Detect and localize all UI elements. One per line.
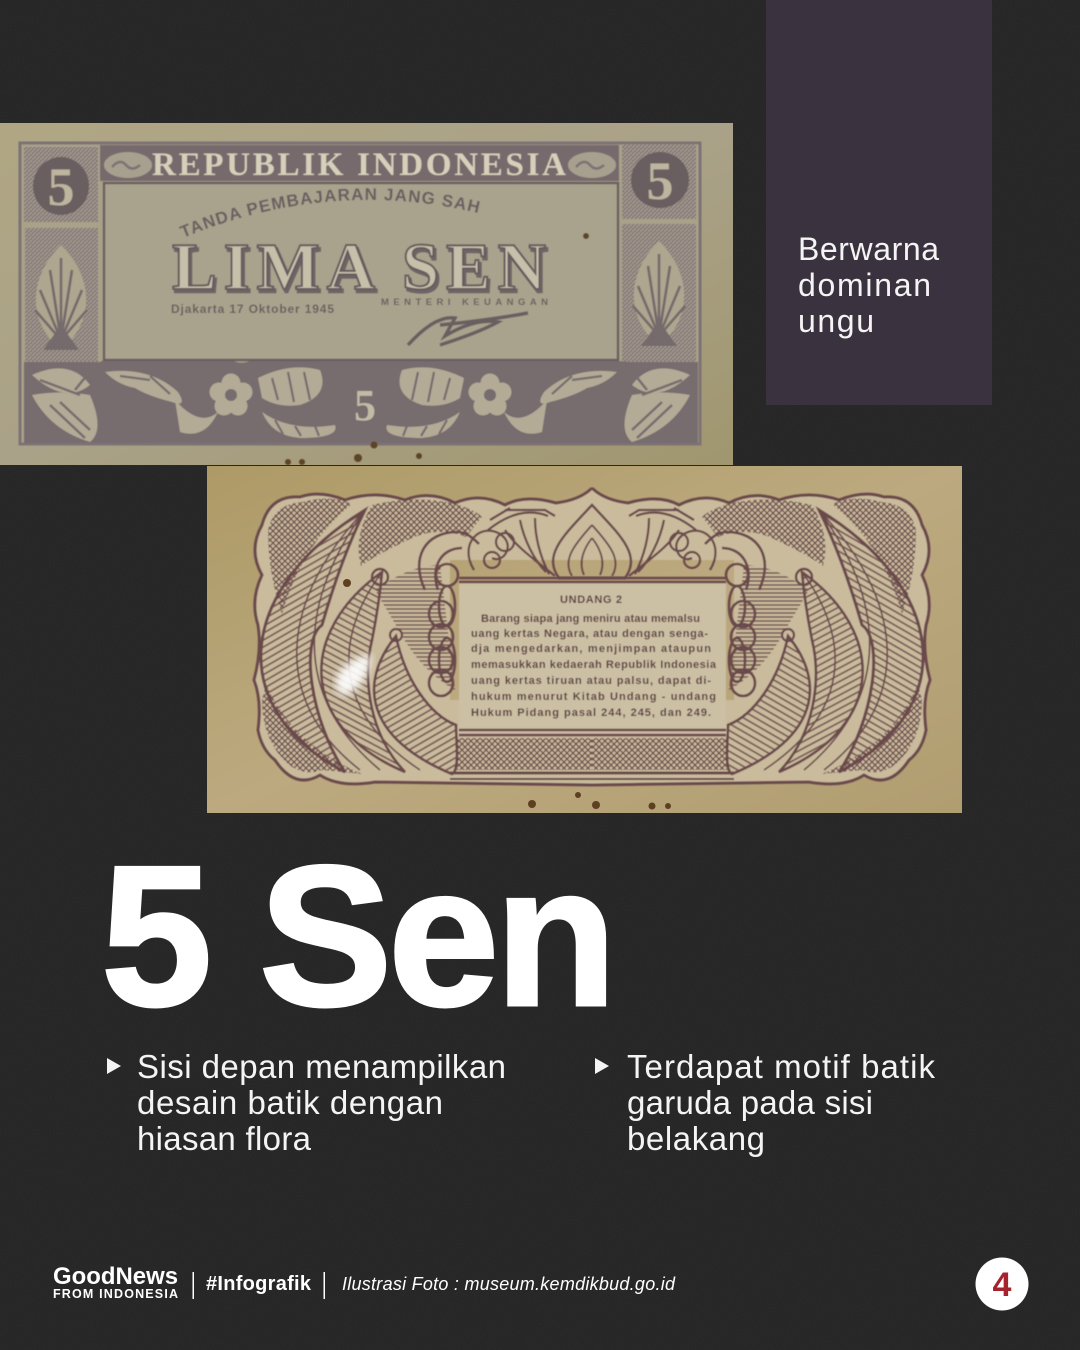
photo: banknote front: 5 xyxy=(48,157,74,217)
top corner mesh xyxy=(268,498,352,614)
spots xyxy=(285,233,589,465)
flower left xyxy=(210,374,252,416)
glare on glass xyxy=(336,655,372,695)
flower right xyxy=(468,374,512,416)
legal text panel: memasukkan kedaerah Republik Indonesia xyxy=(471,659,717,671)
legal text panel xyxy=(459,578,726,735)
top scroll xyxy=(468,508,555,576)
bullet column: front description xyxy=(107,1048,506,1157)
text: colour description: Berwarna xyxy=(798,231,939,267)
panel: purple colour note xyxy=(766,0,992,405)
bottom corner mesh xyxy=(262,684,362,774)
corner leaf right xyxy=(624,368,690,442)
spots xyxy=(343,579,671,810)
heading: 5 Sen: 5 Sen xyxy=(101,825,617,1048)
icon: triangle bullet xyxy=(107,1058,121,1074)
date line: Djakarta 17 Oktober 1945 xyxy=(171,302,334,316)
floral band ornaments xyxy=(210,374,512,416)
inner leaf xyxy=(374,636,457,774)
chain column xyxy=(419,532,479,696)
bullet column: back description xyxy=(595,1048,936,1157)
page number badge: 4 xyxy=(993,1266,1012,1304)
text block xyxy=(627,1048,936,1157)
minister line: MENTERI KEUANGAN xyxy=(381,297,548,308)
band title: REPUBLIK INDONESIA xyxy=(152,147,566,183)
photo credit: Ilustrasi Foto : museum.kemdikbud.go.id xyxy=(342,1274,676,1294)
denomination: LIMA SEN xyxy=(174,233,548,307)
logo: GoodNews xyxy=(53,1263,178,1290)
text block: belakang xyxy=(627,1120,765,1157)
band scroll left xyxy=(104,152,152,178)
signature xyxy=(408,313,528,345)
legal text panel: dja mengedarkan, menjimpan ataupun xyxy=(471,643,711,655)
band scroll right xyxy=(568,152,616,178)
text block: Sisi depan menampilkan xyxy=(137,1048,506,1085)
legal text panel: hukum menurut Kitab Undang - undang xyxy=(471,691,716,703)
logo: FROM INDONESIA xyxy=(53,1287,178,1301)
text block: hiasan flora xyxy=(137,1120,312,1157)
centre bud xyxy=(553,505,631,578)
legal text panel: uang kertas tiruan atau palsu, dapat di- xyxy=(471,675,711,687)
photo: banknote front: 5 xyxy=(646,151,674,211)
bottom flowers xyxy=(456,738,592,770)
photo: banknote front: TANDA PEMBAJARAN JANG SAH xyxy=(178,188,480,237)
bottom band xyxy=(24,360,698,443)
legal text panel: UNDANG 2 xyxy=(560,594,622,606)
text block: desain batik dengan xyxy=(137,1084,443,1121)
corner box left xyxy=(24,147,98,222)
text block xyxy=(137,1048,506,1157)
page number badge xyxy=(976,1258,1028,1310)
corner box right xyxy=(622,144,696,219)
legal text panel: uang kertas Negara, atau dengan senga- xyxy=(471,628,708,640)
photo: banknote back xyxy=(207,466,962,813)
text: colour description: ungu xyxy=(798,303,874,339)
denomination: LIMA SEN xyxy=(172,230,546,304)
text block: Terdapat motif batik xyxy=(627,1048,936,1085)
text block: garuda pada sisi xyxy=(627,1084,873,1121)
icon: triangle bullet xyxy=(595,1058,609,1074)
centre numeral: 5 xyxy=(354,381,376,430)
legal text panel: Hukum Pidang pasal 244, 245, dan 249. xyxy=(471,707,711,719)
left half ornament xyxy=(254,488,592,785)
top band xyxy=(100,145,619,181)
scalloped outline xyxy=(254,488,592,785)
text: colour description: dominan xyxy=(798,267,931,303)
side panel right xyxy=(622,224,696,364)
hashtag: #Infografik xyxy=(206,1273,312,1295)
footer xyxy=(53,1263,676,1301)
legal text panel: Barang siapa jang meniru atau memalsu xyxy=(481,613,700,625)
photo: banknote front xyxy=(0,123,733,466)
text: colour description xyxy=(798,231,939,339)
curved subtitle xyxy=(183,200,540,238)
side panel left xyxy=(25,228,98,368)
central text field xyxy=(104,183,618,360)
outer leaf xyxy=(261,510,365,772)
corner leaf left xyxy=(32,368,98,442)
horizontal hatch behind panel xyxy=(375,565,455,690)
outer frame xyxy=(20,143,700,444)
middle leaf xyxy=(321,572,405,772)
